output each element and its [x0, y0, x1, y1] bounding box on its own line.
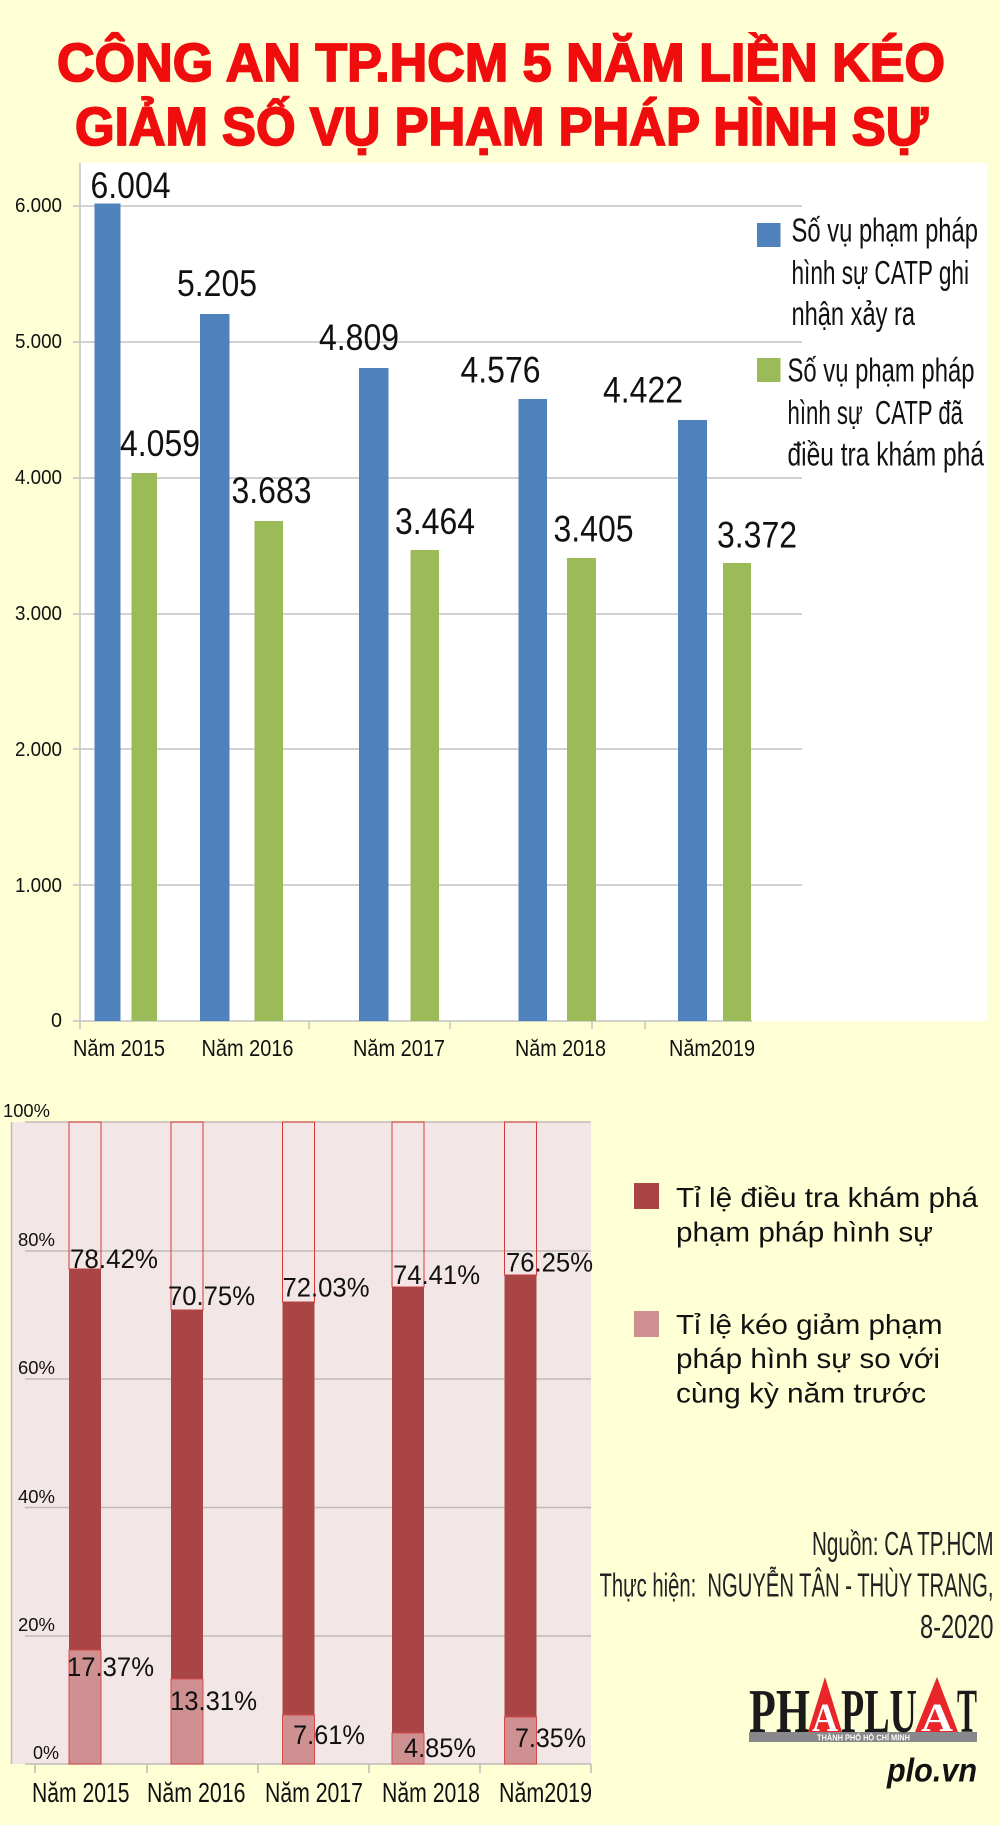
y axis labels: 80% — [18, 1230, 55, 1250]
value labels: reduction rate: 4.85% — [404, 1733, 476, 1763]
value labels: solved cases — [120, 423, 797, 556]
logo: Pháp Luật: PLU — [841, 1678, 917, 1746]
logo: Pháp Luật: A — [921, 1695, 953, 1740]
x axis labels: top chart: Năm 2015 — [73, 1035, 165, 1061]
value labels: reduction rate: 13.31% — [170, 1686, 257, 1716]
y axis labels: 60% — [18, 1358, 55, 1378]
hollow 100% bars — [69, 1122, 536, 1310]
value labels: recorded cases: 5.205 — [177, 263, 257, 304]
value labels: investigation rate: 72.03% — [282, 1272, 370, 1302]
y axis labels: 5.000 — [15, 331, 62, 353]
value labels: reduction rate: 7.35% — [515, 1723, 586, 1753]
title: CÔNG AN TP.HCM 5 NĂM LIỀN KÉO — [57, 32, 945, 93]
y axis labels: 3.000 — [15, 603, 62, 625]
x axis labels: top chart: Năm 2018 — [515, 1035, 606, 1061]
x axis labels: bottom chart: Năm 2015 — [32, 1777, 130, 1808]
x axis labels: bottom chart: Năm 2016 — [147, 1777, 246, 1808]
logo: Pháp Luật: THÀNH PHỐ HỒ CHÍ MINH — [817, 1732, 910, 1742]
value labels: investigation rate: 76.25% — [506, 1248, 593, 1278]
legend: recorded cases: nhận xảy ra — [792, 295, 915, 332]
panel: bar chart of cases recorded and solved — [15, 163, 987, 1032]
value labels: investigation rate: 74.41% — [393, 1260, 480, 1290]
x axis labels: top chart: Năm2019 — [669, 1035, 755, 1061]
value labels: recorded cases — [90, 165, 683, 410]
legend: reduction rate: Tỉ lệ kéo giảm phạm — [676, 1309, 942, 1340]
y axis labels: 1.000 — [15, 875, 62, 897]
value labels: solved cases: 3.405 — [554, 508, 634, 550]
legend: investigation rate: phạm pháp hình sự — [676, 1216, 933, 1248]
value labels: investigation rate: 78.42% — [70, 1244, 158, 1274]
y axis labels — [3, 1101, 59, 1763]
value labels: solved cases: 3.372 — [717, 514, 797, 556]
y axis labels: 40% — [18, 1487, 55, 1507]
legend: investigation rate — [634, 1182, 978, 1248]
value labels: solved cases: 3.464 — [395, 501, 475, 542]
logo: Pháp Luật: A — [812, 1695, 838, 1740]
value labels: recorded cases: 4.422 — [603, 370, 683, 410]
title: GIẢM SỐ VỤ PHẠM PHÁP HÌNH SỰ — [75, 97, 928, 157]
legend: solved cases — [757, 352, 984, 472]
legend: reduction rate: cùng kỳ năm trước — [676, 1378, 926, 1408]
value labels: reduction rate: 7.61% — [293, 1720, 365, 1750]
logo: Pháp Luật: PH — [749, 1678, 810, 1746]
green bars — [132, 473, 751, 1021]
legend: reduction rate — [634, 1309, 942, 1408]
value labels: recorded cases: 4.576 — [460, 350, 540, 390]
value labels: reduction rate — [67, 1652, 586, 1763]
y axis labels: 2.000 — [15, 739, 62, 761]
legend: recorded cases — [757, 212, 978, 332]
legend: investigation rate: Tỉ lệ điều tra khám phá — [676, 1182, 978, 1213]
x axis labels: top chart: Năm 2017 — [353, 1035, 445, 1061]
source and credits — [600, 1525, 994, 1645]
x axis labels: top chart — [73, 1035, 755, 1061]
x axis labels: bottom chart: Năm 2017 — [265, 1777, 363, 1808]
panel: percentage chart — [3, 1101, 593, 1773]
x axis labels: top chart: Năm 2016 — [202, 1035, 294, 1061]
text: T — [957, 1678, 977, 1746]
value labels: solved cases: 3.683 — [232, 470, 312, 511]
legend: reduction rate: pháp hình sự so với — [676, 1343, 940, 1374]
logo: Pháp Luật — [749, 1677, 977, 1746]
value labels: solved cases: 4.059 — [120, 423, 200, 464]
y axis labels: 20% — [18, 1615, 55, 1635]
value labels: recorded cases: 4.809 — [319, 317, 399, 358]
value labels: investigation rate — [70, 1244, 593, 1311]
value labels: reduction rate: 17.37% — [67, 1652, 154, 1682]
title — [57, 32, 945, 157]
y axis labels — [15, 195, 62, 1032]
light bars: reduction rate — [69, 1650, 536, 1764]
y axis labels: 6.000 — [15, 195, 62, 217]
y axis labels: 100% — [3, 1101, 50, 1121]
x axis labels: bottom chart: Năm 2018 — [382, 1777, 480, 1808]
value labels: investigation rate: 70.75% — [168, 1281, 255, 1311]
y axis labels: 0% — [33, 1743, 59, 1763]
dark bars: investigation rate — [69, 1269, 536, 1733]
y axis labels: 0 — [51, 1010, 62, 1032]
x axis labels: bottom chart: Năm2019 — [499, 1777, 592, 1808]
blue bars — [94, 204, 707, 1021]
value labels: recorded cases: 6.004 — [90, 165, 170, 206]
website: plo.vn: plo.vn — [886, 1752, 977, 1788]
y axis labels: 4.000 — [15, 467, 62, 489]
x axis labels: bottom chart — [32, 1777, 592, 1808]
